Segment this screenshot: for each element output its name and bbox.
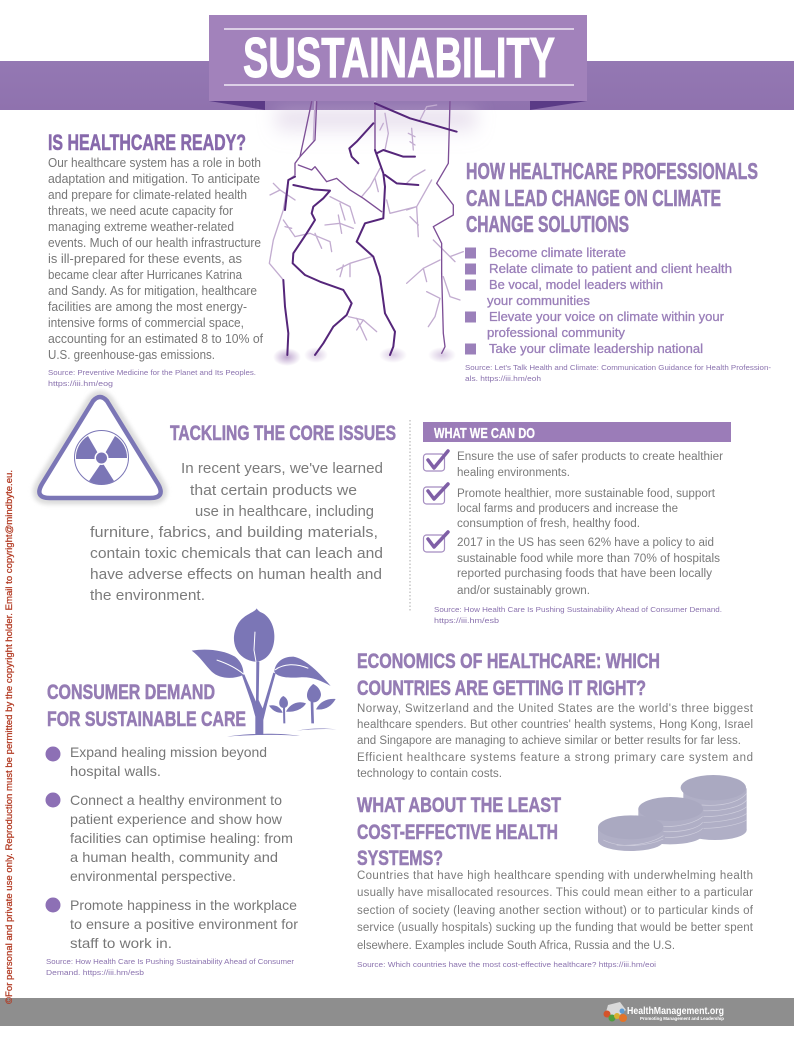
body text: and prepare for climate-related health [48,188,247,202]
bullet list: professional community [487,326,626,340]
bullet dots [46,746,60,912]
heading: COUNTRIES ARE GETTING IT RIGHT? [357,676,646,700]
body text [357,703,754,780]
body text: have adverse effects on human health and [90,566,382,583]
bullet list [465,246,732,356]
body text: Our healthcare system has a role in both [48,156,261,170]
body text: threats, we need acute capacity for [48,204,233,218]
heading bar [423,422,731,442]
bullet text: Connect a healthy environment to [70,792,282,808]
bullet text: facilities can optimise healing: from [70,830,293,846]
body text: that certain products we [190,482,357,499]
panel: economics of healthcare [357,649,754,780]
body text: and Sandy. As for mitigation, healthcare [48,284,257,298]
body text: the environment. [90,587,205,604]
list text: sustainable food while more than 70% of hospitals [457,553,720,565]
list text: and/or sustainably grown. [457,585,590,597]
body text: accounting for an estimated 8 to 10% of [48,332,264,346]
icon: checkmarks [424,451,448,552]
list text: consumption of fresh, healthy food. [457,518,640,530]
bullet text: environmental perspective. [70,868,236,884]
heading: COST-EFFECTIVE HEALTH [357,820,558,844]
bullet list: Relate climate to patient and client health [489,262,732,276]
heading bar: WHAT WE CAN DO [434,425,535,442]
heading: TACKLING THE CORE ISSUES [170,421,396,445]
heading: CONSUMER DEMAND [47,680,215,704]
icon: radiation warning sign [39,397,161,498]
body text: use in healthcare, including [195,503,374,520]
body text: is ill-prepared for these events, as [48,252,242,266]
body text: Norway, Switzerland and the United States are the world's three biggest [357,703,754,715]
body text: and Singapore are managing to achieve similar or better results for far less. [357,735,741,747]
heading [466,158,758,237]
source: Demand. https://iii.hm/esb [46,968,144,977]
copyright watermark: ©For personal and private use only. Reproduction must be permitted by the copyright holder. Email to copyright@mindbyte.eu. [4,470,15,1004]
body text: technology to contain costs. [357,768,502,780]
bullet text: Promote happiness in the workplace [70,897,297,913]
body text [90,460,383,604]
source: Source: How Health Care Is Pushing Sustainability Ahead of Consumer Demand. [434,605,722,614]
body text: Countries that have high healthcare spending with underwhelming health [357,870,753,882]
source: https://iii.hm/esb [434,616,499,625]
bullet text: patient experience and show how [70,811,283,827]
body text: adaptation and mitigation. To anticipate [48,172,260,186]
heading [357,649,660,700]
panel: how healthcare professionals can lead [465,158,772,383]
list text: 2017 in the US has seen 62% have a policy to aid [457,537,714,549]
heading [357,793,561,870]
source: als. https://iii.hm/eoh [465,374,541,383]
panel: least cost-effective health systems [357,793,754,969]
panel: tackling the core issues [90,421,396,604]
body text: section of society (leaving another section without) or to particular kinds of [357,905,754,917]
logo: HealthManagement.org: HealthManagement.org [627,1005,724,1017]
source [465,363,772,383]
source: Source: How Health Care Is Pushing Sustainability Ahead of Consumer [46,957,295,966]
source: Source: Which countries have the most cost-effective healthcare? https://iii.hm/eoi [357,960,656,969]
bullet text [70,744,298,951]
bullet text: to ensure a positive environment for [70,916,298,932]
heading: SYSTEMS? [357,846,443,870]
logo: HealthManagement.org [604,1002,724,1022]
source [48,368,256,388]
bullet list: Become climate literate [489,246,626,260]
icon: plant [192,608,337,737]
source [46,957,295,977]
heading: FOR SUSTAINABLE CARE [47,707,246,731]
body text [357,870,754,952]
source: https://iii.hm/eog [48,379,113,388]
body text: Efficient healthcare systems feature a strong primary care system and [357,752,753,764]
title: SUSTAINABILITY [243,26,555,90]
heading: WHAT ABOUT THE LEAST [357,793,561,817]
body text: usually have misallocated resources. This could mean either to a particular [357,887,753,899]
body text: service (usually hospitals) sucking up the funding that would be better spent [357,922,754,934]
body text: events. Much of our health infrastructure [48,236,261,250]
bullet text: staff to work in. [70,935,172,951]
body text: elsewhere. Examples include South Africa, Russia and the U.S. [357,940,675,952]
body text: became clear after Hurricanes Katrina [48,268,242,282]
list text: Promote healthier, more sustainable food, support [457,488,716,500]
heading: CHANGE SOLUTIONS [466,211,629,237]
list text: local farms and producers and increase the [457,503,678,515]
footer bar [0,998,794,1026]
body text: managing extreme weather-related [48,220,234,234]
title banner [209,15,587,110]
bullet list: Elevate your voice on climate within your [489,310,724,324]
heading: ECONOMICS OF HEALTHCARE: WHICH [357,649,660,673]
panel: is healthcare ready [48,130,264,388]
body text: In recent years, we've learned [181,460,383,477]
logo: HealthManagement.org: Promoting Management and Leadership [640,1016,724,1021]
bullet list: your communities [487,294,590,308]
bullet text: a human health, community and [70,849,278,865]
source: Source: Let's Talk Health and Climate: Communication Guidance for Health Profession- [465,363,772,372]
body text: U.S. greenhouse-gas emissions. [48,348,215,362]
list text: healing environments. [457,467,570,479]
header band [0,61,794,110]
list text [457,451,723,597]
panel: what we can do [423,422,731,625]
body text: contain toxic chemicals that can leach and [90,545,383,562]
panel: consumer demand [46,680,298,977]
heading: IS HEALTHCARE READY? [48,130,246,155]
bullet text: Expand healing mission beyond [70,744,267,760]
heading [47,680,246,731]
list text: Ensure the use of safer products to create healthier [457,451,723,463]
body text: intensive forms of commercial space, [48,316,244,330]
icon: stacks of coins [598,775,747,851]
body text [48,156,264,362]
source [434,605,722,625]
list text: reported purchasing foods that have been locally [457,568,712,580]
body text: healthcare spenders. But other countries' health systems, Hong Kong, Israel [357,719,753,731]
bullet list: Be vocal, model leaders within [489,278,663,292]
body text: furniture, fabrics, and building materials, [90,524,378,541]
bullet list: Take your climate leadership national [489,342,703,356]
bullet text: hospital walls. [70,763,161,779]
source: Source: Preventive Medicine for the Planet and Its Peoples. [48,368,256,377]
illustration: climate river veins [269,102,476,366]
body text: facilities are among the most energy- [48,300,247,314]
